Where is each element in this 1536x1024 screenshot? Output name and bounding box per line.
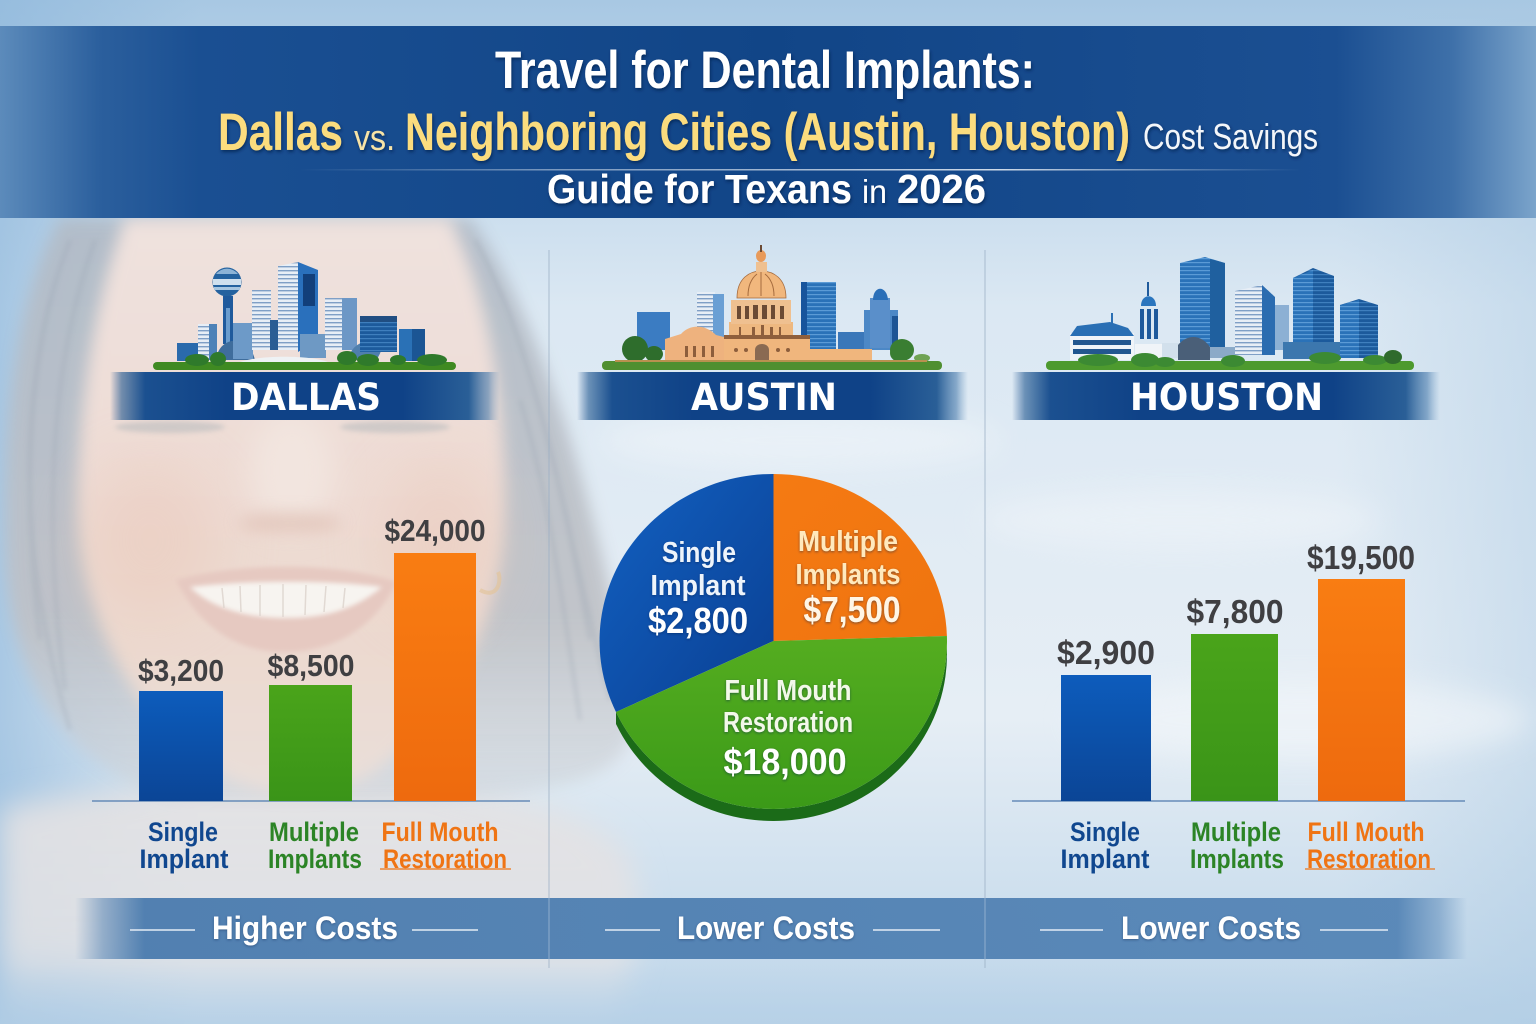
cost verdict strip (75, 898, 1467, 959)
verdict: Houston lower costs: Lower Costs (1121, 910, 1301, 946)
slice: single implant $2,800: $2,800 (648, 600, 748, 641)
panel: Austin (577, 245, 968, 821)
bar: full mouth $19,500 (1307, 539, 1415, 801)
skyline: Dallas (153, 262, 456, 370)
city banner: Dallas: DALLAS (231, 376, 381, 419)
title line 3: in (862, 173, 887, 210)
category labels: Houston: Restoration (1307, 844, 1431, 874)
bar: full mouth $19,500: $19,500 (1307, 539, 1415, 576)
verdict: Austin lower costs: Lower Costs (677, 910, 855, 946)
panel: Houston (1012, 257, 1465, 874)
bar chart: Houston (1012, 539, 1465, 801)
category labels: Houston: Full Mouth (1308, 817, 1424, 847)
slice: full mouth $18,000: Full Mouth (724, 675, 852, 707)
title line 2: vs. (354, 117, 395, 158)
category labels: Dallas (140, 817, 511, 874)
category labels: Houston: Multiple (1191, 817, 1281, 847)
pie chart: Austin (600, 474, 947, 821)
bottom haze across the full width (0, 965, 1536, 1024)
category labels: Houston (1060, 817, 1435, 874)
category labels: Dallas: Multiple (269, 817, 359, 847)
earring (480, 572, 499, 593)
city banner: Houston: HOUSTON (1130, 376, 1323, 419)
slice: full mouth $18,000: $18,000 (724, 741, 846, 782)
category labels: Dallas: Full Mouth (382, 817, 498, 847)
title line 3: Guide for Texans (547, 166, 852, 212)
category labels: Dallas: Implants (268, 844, 362, 874)
hair (5, 218, 632, 800)
slice: multiple implants $7,500: Implants (796, 559, 900, 591)
skyline: Austin (602, 245, 942, 370)
title line 2: Cost Savings (1143, 116, 1318, 157)
city banner: Austin: AUSTIN (691, 376, 837, 419)
cheeks (80, 460, 500, 620)
category labels: Dallas: Single (148, 817, 218, 847)
header band (0, 26, 1536, 218)
slice: single implant $2,800: Implant (650, 570, 746, 602)
slice: multiple implants $7,500: $7,500 (804, 589, 900, 630)
slice: full mouth $18,000 (616, 636, 947, 809)
eyes (115, 421, 450, 433)
category labels: Dallas: Restoration (383, 844, 507, 874)
category labels: Dallas: Implant (140, 844, 228, 874)
category labels: Houston: Implant (1060, 844, 1150, 874)
city banner: Austin (577, 372, 968, 420)
column dividers (549, 250, 985, 968)
category labels: Houston: Implants (1190, 844, 1284, 874)
background photo: smiling woman (0, 218, 639, 1024)
face (78, 218, 505, 794)
bar: multiple implants $7,800 (1186, 593, 1284, 801)
bar: single implant $2,900 (1057, 634, 1155, 801)
slice: single implant $2,800 (600, 474, 774, 712)
bar: multiple implants $8,500: $8,500 (268, 648, 354, 683)
title line 3: 2026 (897, 166, 986, 212)
slice: multiple implants $7,500 (774, 474, 947, 641)
bar: full mouth $24,000 (384, 513, 486, 801)
title line 2: Dallas (218, 103, 343, 162)
title (218, 41, 1318, 212)
category labels: Houston: Single (1070, 817, 1140, 847)
title line 1: Travel for Dental Implants: (495, 41, 1035, 100)
bar: single implant $3,200: $3,200 (138, 653, 224, 688)
shoulders (0, 770, 639, 1024)
bar: single implant $2,900: $2,900 (1057, 634, 1155, 671)
bar: full mouth $24,000: $24,000 (384, 513, 486, 548)
bar: multiple implants $8,500 (268, 648, 354, 801)
city banner: Houston (1012, 372, 1440, 420)
verdict: Dallas higher costs: Higher Costs (212, 910, 398, 946)
hair strands (30, 240, 610, 730)
city banner: Dallas (110, 372, 500, 420)
panel: Dallas (92, 262, 530, 874)
slice: multiple implants $7,500: Multiple (798, 526, 898, 558)
slice: full mouth $18,000: Restoration (723, 707, 853, 739)
title line 2: Neighboring Cities (Austin, Houston) (405, 103, 1130, 162)
nose (238, 410, 342, 533)
skyline: Houston (1046, 257, 1414, 370)
bar: multiple implants $7,800: $7,800 (1186, 593, 1284, 630)
bar chart: Dallas (92, 513, 530, 801)
bar: single implant $3,200 (138, 653, 224, 801)
slice: single implant $2,800: Single (662, 537, 736, 569)
smile (176, 567, 396, 652)
